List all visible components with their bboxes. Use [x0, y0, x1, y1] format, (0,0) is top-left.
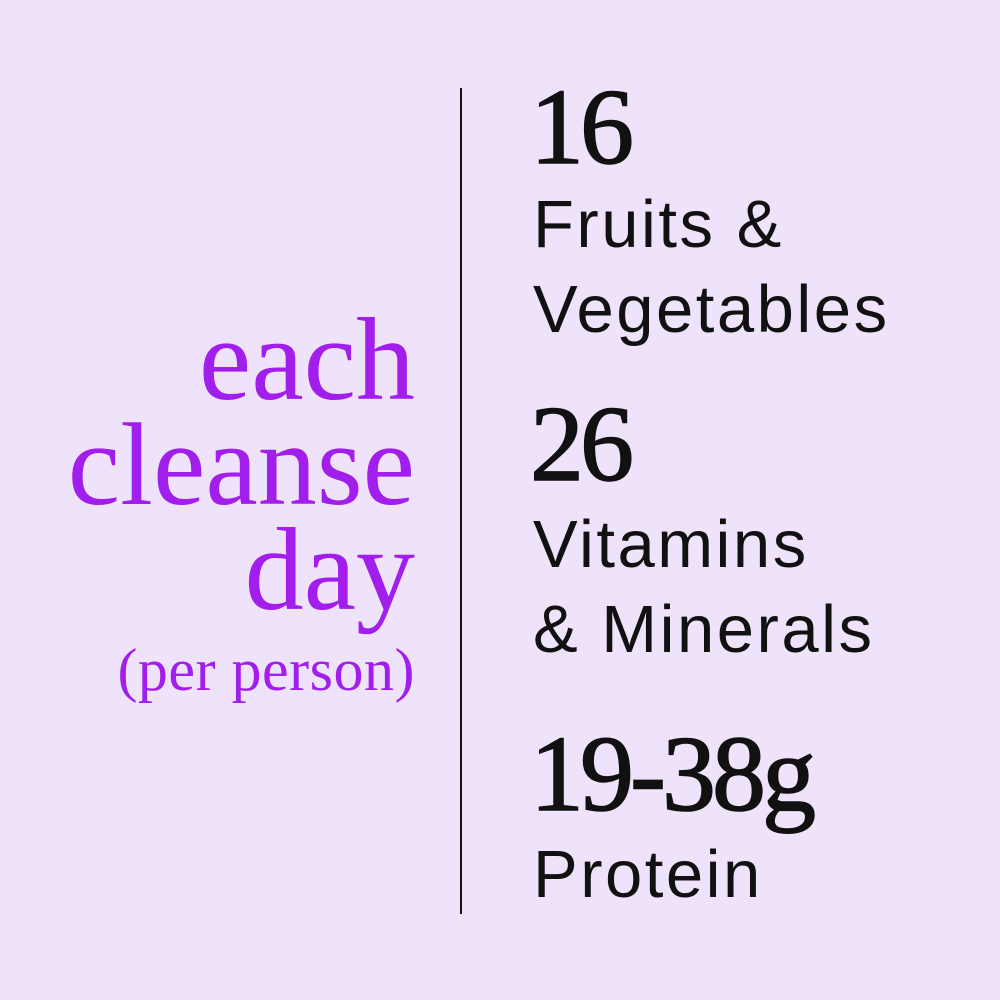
heading: each cleanse day: day: [245, 504, 415, 635]
stat: 19-38g protein: Protein: [533, 837, 763, 912]
heading: each cleanse day: [68, 294, 415, 635]
stat: 16 fruits & vegetables: [530, 68, 890, 347]
stat: 26 vitamins & minerals: 26: [530, 385, 630, 504]
stat: 26 vitamins & minerals: & Minerals: [533, 592, 874, 667]
stat: 26 vitamins & minerals: [530, 385, 874, 667]
heading: each cleanse day: each: [199, 294, 415, 425]
stat: 16 fruits & vegetables: Vegetables: [533, 272, 890, 347]
divider line: [460, 88, 462, 914]
stat: 16 fruits & vegetables: Fruits &: [533, 187, 784, 262]
stat: 19-38g protein: [530, 715, 815, 912]
stat: 26 vitamins & minerals: Vitamins: [533, 507, 809, 582]
heading: each cleanse day: cleanse: [68, 399, 415, 530]
subheading: per person: (per person): [117, 637, 415, 703]
stat: 19-38g protein: 19-38g: [530, 715, 812, 834]
stat: 16 fruits & vegetables: 16: [530, 68, 630, 187]
